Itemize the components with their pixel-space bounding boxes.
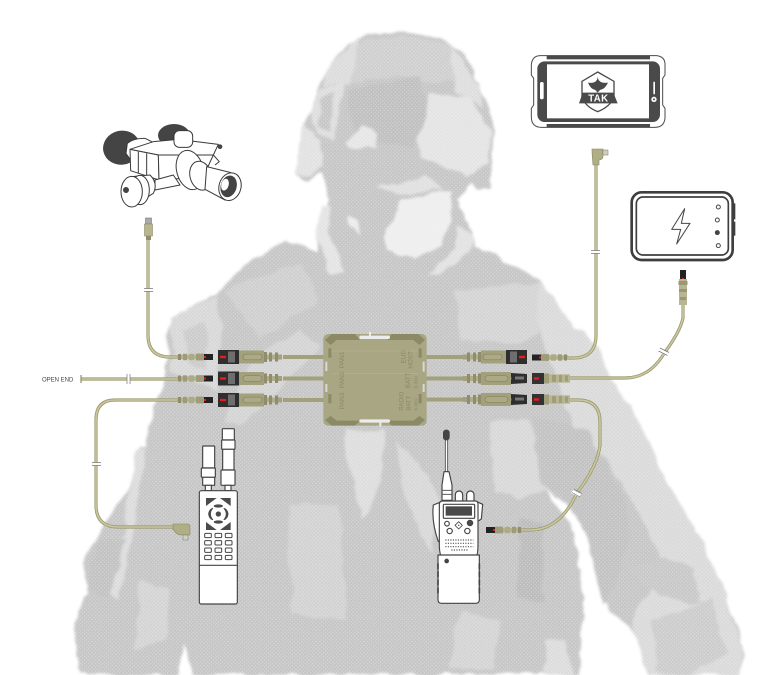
hub port labels: RADIO: [399, 391, 405, 411]
cable break mark: [658, 348, 669, 356]
hub box: [323, 332, 427, 426]
d-pad: [206, 498, 231, 530]
lightning bolt: [672, 209, 690, 244]
focus knob: [121, 175, 155, 207]
top knobs: [455, 491, 463, 504]
hub port labels: PAN1: [339, 351, 346, 368]
cable break mark: [143, 288, 153, 292]
cable break mark: [591, 250, 601, 254]
right-angle connector: [592, 149, 608, 165]
housing: [130, 131, 222, 190]
sensor and camera: [651, 82, 657, 102]
cable: battery: [568, 270, 688, 378]
eyecups: [100, 124, 190, 168]
helmet and face shading: [295, 35, 490, 277]
USB connector: [144, 218, 152, 240]
tablet body: [537, 61, 660, 122]
hub rim details: [325, 332, 425, 426]
end cap: [80, 375, 82, 383]
device: battery: [632, 192, 735, 260]
cable: USB to hub: [143, 218, 178, 357]
battery casing: [632, 192, 733, 260]
short antenna: [201, 446, 215, 491]
battery pack: [438, 555, 479, 603]
long antenna: [221, 429, 235, 491]
hub port labels: 8-36V: [413, 397, 418, 411]
cable break mark: [571, 489, 582, 497]
keypad: [205, 533, 232, 560]
TAK logo: TAK: [588, 94, 608, 105]
eyepiece tube: [126, 138, 155, 166]
eagle: [588, 77, 608, 93]
cable break mark: [91, 462, 101, 466]
hub port labels: BATT: [406, 395, 412, 411]
hub port labels: PAN2: [339, 371, 346, 388]
device: handheld radio: [433, 430, 483, 603]
cable break mark: [127, 374, 130, 384]
device: night vision goggles: [100, 124, 244, 207]
hub trunk cables: [283, 355, 463, 402]
device: tablet with TAK app: [531, 56, 665, 127]
radio body: [199, 491, 237, 604]
right connector pairs: [463, 350, 570, 406]
device: left tactical radio: [199, 429, 237, 604]
speaker grille: [445, 540, 473, 550]
hub port labels: PAN3: [339, 392, 346, 409]
whip antenna: [442, 430, 452, 500]
objective lens: [172, 147, 244, 203]
home button: [540, 82, 544, 99]
hub port labels: EUD: [400, 350, 407, 363]
display: [443, 504, 475, 518]
right-angle connector: [173, 524, 190, 540]
radio upper body: [439, 501, 478, 557]
hub port labels: [339, 350, 418, 411]
tablet screen: [547, 64, 649, 118]
cable: open end: [81, 374, 178, 384]
hub port labels: BATT.: [405, 371, 412, 388]
radio plug: [486, 527, 522, 533]
buttons: [445, 521, 449, 526]
tablet outer frame: [531, 56, 665, 127]
hub port labels: 8-36V: [413, 375, 418, 388]
label: open end: OPEN END: [42, 378, 74, 384]
side clips: [433, 502, 441, 542]
banner: [579, 93, 618, 103]
torso and arm shading: [85, 262, 575, 675]
left connector pairs: [177, 350, 282, 407]
battery plug: [678, 270, 688, 305]
status LEDs: [715, 205, 720, 248]
cable: tablet: [566, 149, 608, 358]
right sleeve shading: [533, 280, 743, 675]
cable: left radio: [91, 400, 190, 540]
hub port labels: HOST: [407, 351, 414, 369]
cable: handheld radio: [486, 400, 600, 533]
